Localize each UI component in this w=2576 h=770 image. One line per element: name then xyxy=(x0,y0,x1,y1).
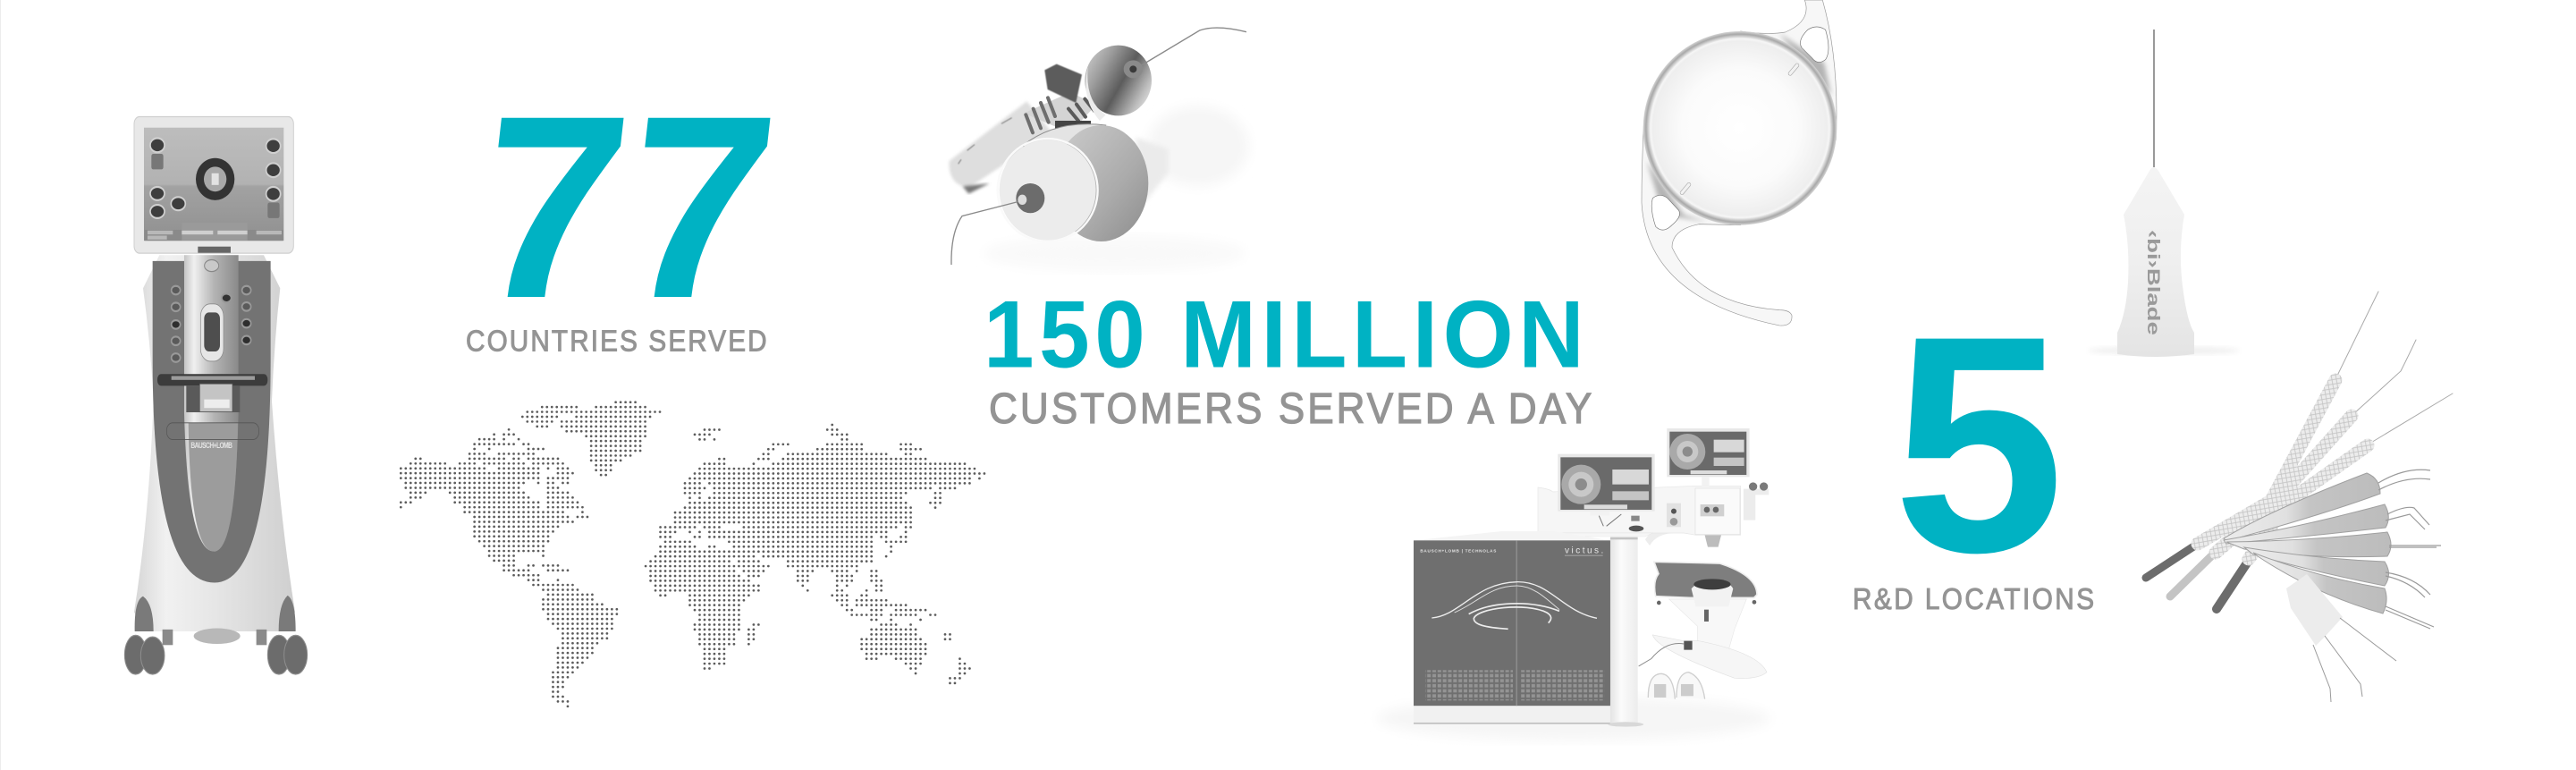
map: Greenland xyxy=(522,402,661,475)
big number: 150 million: 150 MILLION xyxy=(984,282,1584,388)
product image: Victus laser platform xyxy=(1377,428,1770,740)
label: countries served: COUNTRIES SERVED xyxy=(466,325,767,358)
product image: surgical instruments fan xyxy=(2146,292,2453,702)
big number: 5: 5 xyxy=(1893,273,2065,617)
map: Eurasia, Africa and Oceania xyxy=(646,425,984,683)
product image: dual handpieces xyxy=(950,28,1249,271)
product image: Victus laser platform: victus. xyxy=(1565,546,1603,556)
product image: phaco console machine: BAUSCH+LOMB xyxy=(190,441,232,450)
product image: bi-Blade vitrectomy probe xyxy=(2088,30,2240,357)
label: R&amp;D locations: R&D LOCATIONS xyxy=(1853,583,2094,615)
product image: phaco console machine xyxy=(124,117,308,674)
label: customers served a day: CUSTOMERS SERVED A DAY xyxy=(989,384,1592,432)
big number: 77: 77 xyxy=(464,62,788,352)
dotted world map xyxy=(401,402,984,707)
map: Americas xyxy=(401,429,617,707)
bi-Blade brand text: ‹bi›Blade xyxy=(2143,230,2162,335)
product image: Victus laser platform: BAUSCH+LOMB | TECHNOLAS xyxy=(1420,548,1496,553)
page edge xyxy=(0,0,1,770)
product image: intraocular lens xyxy=(1642,0,1837,326)
